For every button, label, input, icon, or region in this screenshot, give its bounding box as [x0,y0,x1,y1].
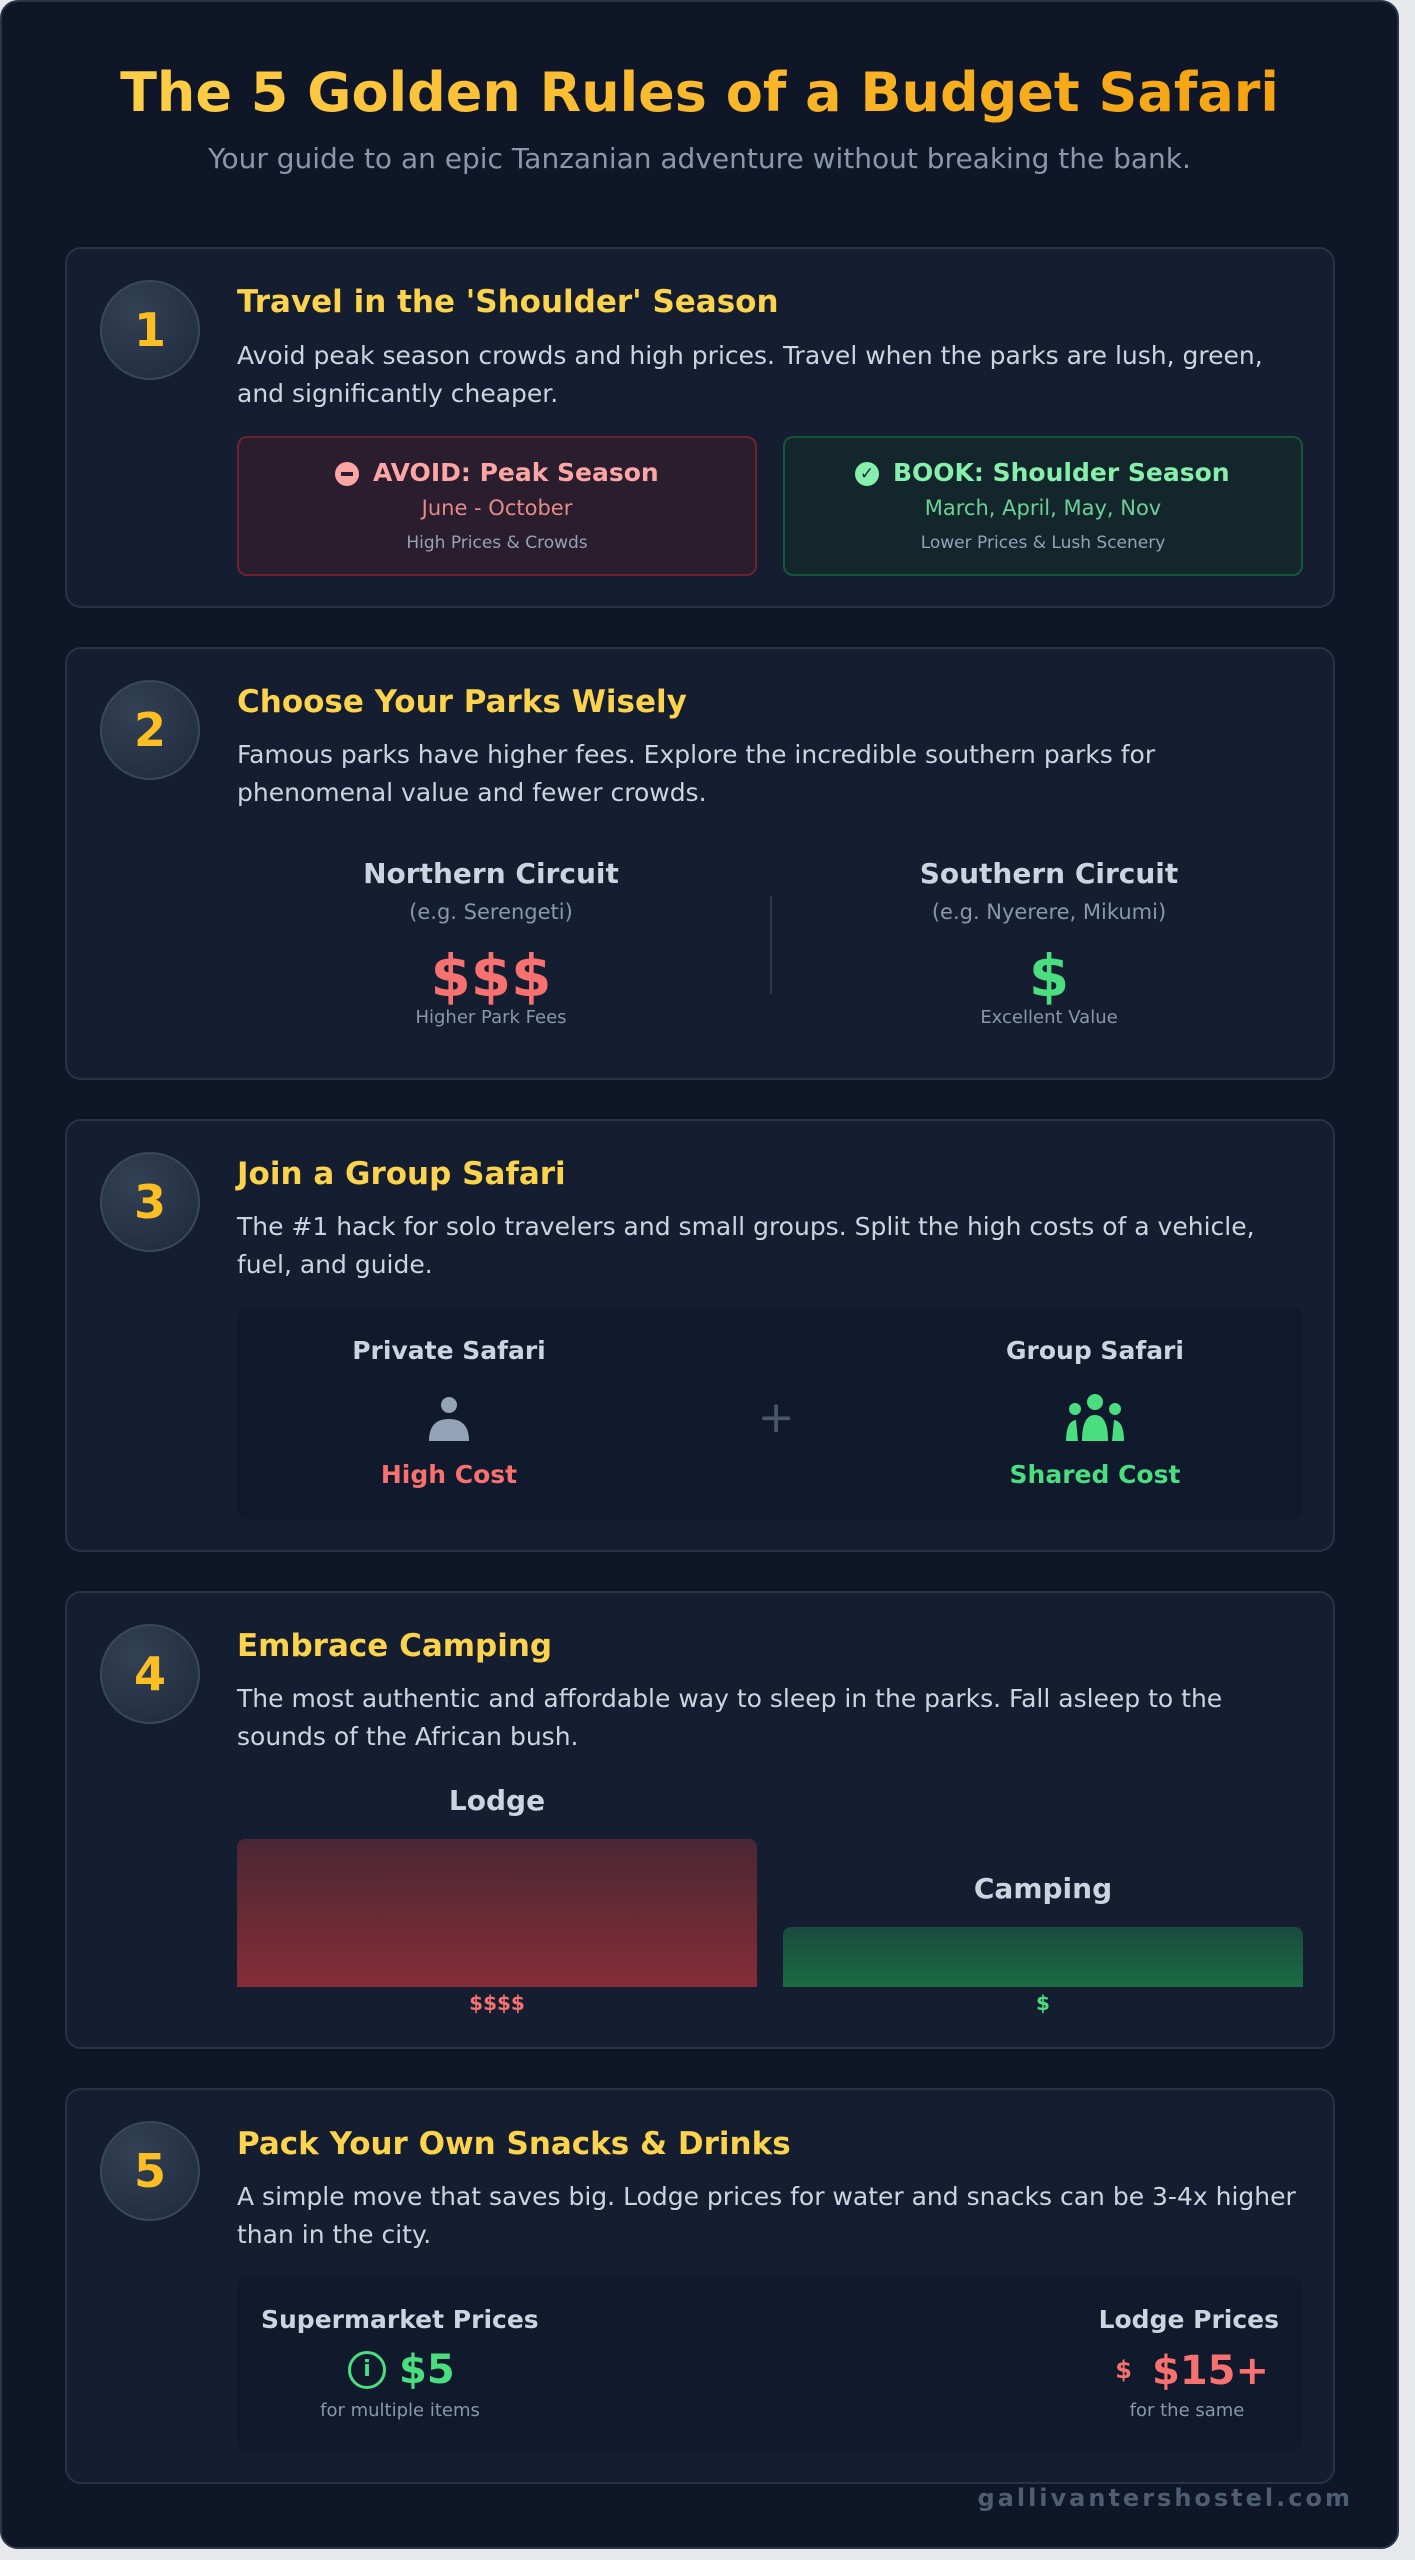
price comparison box [237,2276,1303,2452]
lodge bar [237,1839,757,1987]
camping bar [783,1927,1303,1987]
body 4: The most authentic and affordable way to sleep in the parks. Fall asleep to the sounds of the African bush. [237,1684,1222,1751]
comparison box [237,1307,1303,1520]
southern circuit: Southern Circuit [920,857,1178,890]
number badge 3 [100,1152,200,1252]
subtitle: Your guide to an epic Tanzanian adventure without breaking the bank. [208,142,1191,175]
icon: check [855,462,879,486]
footer: gallivantershostel.com [977,2484,1353,2512]
heading 2: Choose Your Parks Wisely [237,684,687,720]
camping label: Camping [974,1872,1112,1905]
number badge 4 [100,1624,200,1724]
number badge 5: 5 [134,2144,166,2198]
number badge 5 [100,2121,200,2221]
avoid note: High Prices & Crowds [406,533,588,553]
heading 3: Join a Group Safari [237,1156,566,1192]
supermarket price: $5 [399,2347,455,2393]
heading 5: Pack Your Own Snacks & Drinks [237,2126,791,2162]
panel: rule 2: Higher Park Fees [415,1007,567,1028]
panel: rule 2 [65,647,1335,1080]
southern circuit: $ [1029,942,1069,1010]
panel: rule 2: Excellent Value [980,1007,1118,1028]
number badge 2 [100,680,200,780]
icon: minus [335,462,359,486]
heading 1: Travel in the 'Shoulder' Season [237,284,779,320]
lodge label: Lodge [449,1784,545,1817]
panel: rule 5 [65,2088,1335,2484]
icon: info [348,2351,386,2389]
northern circuit [363,857,619,1028]
northern circuit: Northern Circuit [363,857,619,890]
heading 4: Embrace Camping [237,1628,552,1664]
body 2: Famous parks have higher fees. Explore the incredible southern parks for phenomenal value and fewer crowds. [237,740,1155,807]
southern circuit [920,857,1178,1028]
panel: rule 3 [65,1119,1335,1552]
avoid months: June - October [422,496,572,520]
northern circuit: (e.g. Serengeti) [409,900,573,924]
box: book shoulder [783,436,1303,576]
body 1: Avoid peak season crowds and high prices. Travel when the parks are lush, green, and significantly cheaper. [237,341,1263,408]
body 5: A simple move that saves big. Lodge prices for water and snacks can be 3-4x higher than in the city. [237,2182,1296,2249]
box: avoid peak [237,436,757,576]
supermarket label: Supermarket Prices [261,2305,539,2334]
panel: rule 4 [65,1591,1335,2049]
high cost: High Cost [381,1460,517,1489]
book note: Lower Prices & Lush Scenery [921,533,1165,553]
bar chart [237,1784,1303,2015]
body 3: The #1 hack for solo travelers and small groups. Split the high costs of a vehicle, fuel, and guide. [237,1212,1255,1279]
icon: group [1066,1394,1124,1441]
divider [770,896,772,994]
icon: check: ✓ [860,464,874,484]
number badge 1 [100,280,200,380]
icon: info: i [363,2357,371,2382]
lodge price: $$$$ [469,1991,525,2015]
shared cost: Shared Cost [1010,1460,1180,1489]
lodge price: $ $15+ [1115,2348,1269,2394]
icon: person [429,1397,469,1441]
avoid title: AVOID: Peak Season [373,458,659,487]
number badge 3: 3 [134,1175,166,1229]
book months: March, April, May, Nov [925,496,1161,520]
southern circuit: (e.g. Nyerere, Mikumi) [932,900,1166,924]
northern circuit: $$$ [430,942,552,1010]
number badge 1: 1 [134,303,166,357]
camping price: $ [1036,1991,1050,2015]
supermarket note: for multiple items [320,2400,480,2421]
number badge 4: 4 [134,1647,166,1701]
panel: rule 1 [65,247,1335,608]
group safari: Group Safari [1006,1336,1184,1365]
plus sign: + [758,1392,794,1443]
lodge note: for the same [1130,2400,1244,2421]
book title: BOOK: Shoulder Season [893,458,1230,487]
number badge 2: 2 [134,703,166,757]
title: The 5 Golden Rules of a Budget Safari [120,61,1279,124]
lodge label: Lodge Prices [1099,2305,1279,2334]
private safari: Private Safari [352,1336,546,1365]
